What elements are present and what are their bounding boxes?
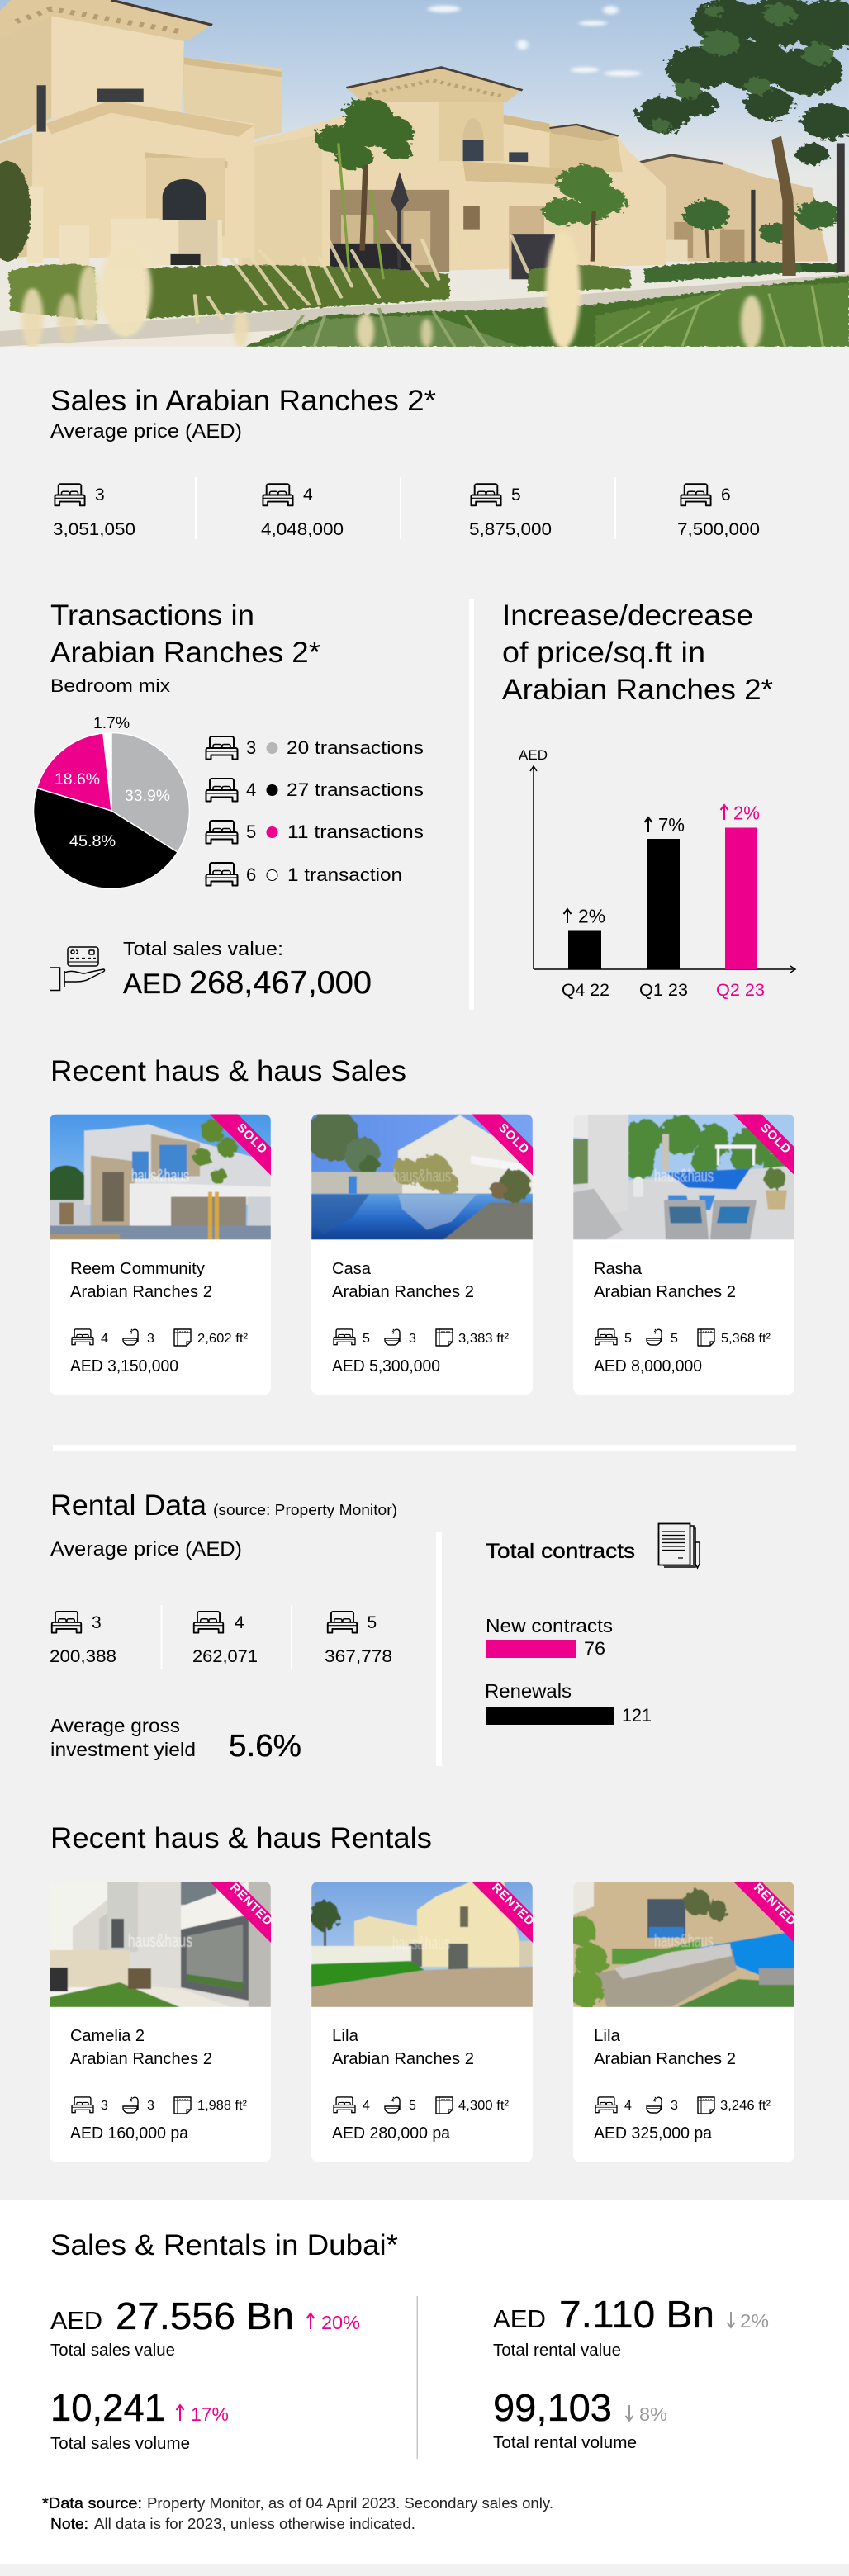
section heading: price per sq.ft change: of price/sq.ft in	[502, 637, 705, 669]
gross investment yield	[50, 1715, 301, 1764]
total sales value: Total sales value:	[123, 938, 283, 959]
heading: recent sales: Recent haus & haus Sales	[50, 1055, 406, 1087]
bar chart: price per sq.ft by quarter: Q1 23	[639, 981, 688, 1000]
card: Casa sale: Arabian Ranches 2	[332, 1283, 474, 1301]
pie legend: 1 transaction	[287, 864, 402, 885]
card: Reem Community sale: SOLD	[234, 1120, 270, 1157]
gross investment yield: 5.6%	[229, 1729, 301, 1764]
average sale price by bedroom: 4	[303, 485, 313, 504]
card: Rasha sale: AED 8,000,000	[594, 1357, 702, 1376]
bar chart: price per sq.ft by quarter: Q2 23	[716, 981, 765, 1000]
card: Lila rental 2: 3	[671, 2099, 678, 2113]
card: Lila rental 2: Arabian Ranches 2	[594, 2050, 736, 2068]
total contracts heading: Total contracts	[486, 1540, 635, 1563]
card: Reem Community sale: AED 3,150,000	[70, 1357, 178, 1376]
card: Lila rental 1: 4	[363, 2099, 370, 2113]
card: Rasha sale: 5,368 ft²	[721, 1332, 771, 1346]
footnote: Note:	[50, 2516, 88, 2532]
card: Rasha sale: Rasha	[594, 1260, 643, 1278]
pie chart: bedroom mix: 1.7%	[93, 715, 130, 732]
stat: total sales value	[50, 2294, 360, 2360]
bar: new contracts: New contracts	[486, 1615, 613, 1636]
average rental price by bedroom: 262,071	[192, 1647, 258, 1666]
card: Lila rental 2: RENTED	[751, 1881, 799, 1929]
bar: new contracts: 76	[584, 1638, 605, 1659]
section heading: price per sq.ft change: Arabian Ranches 2*	[502, 674, 773, 706]
heading: rental data: (source: Property Monitor)	[213, 1502, 397, 1518]
card: Lila rental 2: 4	[624, 2099, 632, 2113]
card: Reem Community sale	[45, 1115, 271, 1395]
bar chart: price per sq.ft by quarter: 7%	[658, 814, 685, 836]
card: Lila rental 1: AED 280,000 pa	[332, 2124, 451, 2143]
bar chart: price per sq.ft by quarter: AED	[519, 747, 548, 763]
card: Camelia 2 rental: Camelia 2	[70, 2027, 145, 2045]
heading: rental data	[50, 1489, 397, 1522]
card: Rasha sale: Arabian Ranches 2	[594, 1283, 736, 1301]
card: Camelia 2 rental: 1,988 ft²	[197, 2099, 248, 2113]
total sales value: AED	[123, 968, 182, 1000]
card: Lila rental 1: haus&haus	[392, 1933, 450, 1953]
card: Casa sale: AED 5,300,000	[332, 1357, 440, 1376]
stat: total rental value	[493, 2293, 769, 2360]
pie chart: bedroom mix: 18.6%	[55, 771, 100, 788]
average sale price by bedroom: 7,500,000	[677, 520, 760, 539]
card: Reem Community sale: 4	[101, 1332, 108, 1346]
stat: total rental value: AED	[493, 2304, 546, 2333]
card: Lila rental 1: 4,300 ft²	[458, 2099, 510, 2113]
card: Casa sale	[306, 1108, 533, 1395]
average rental price by bedroom: Average price (AED)	[50, 1538, 242, 1560]
card: Lila rental 2	[567, 1881, 799, 2162]
footnote: *Data source:	[42, 2495, 142, 2512]
card: Camelia 2 rental: RENTED	[227, 1881, 275, 1929]
card: Casa sale: Casa	[332, 1260, 372, 1278]
bar: renewals: 121	[622, 1705, 652, 1726]
gross investment yield: Average gross	[50, 1715, 180, 1736]
pie legend: 3	[246, 737, 256, 758]
card: Lila rental 1: Lila	[332, 2027, 359, 2045]
average rental price by bedroom: 4	[235, 1613, 244, 1632]
icon: hand holding card	[50, 947, 104, 991]
pie chart: bedroom mix: 33.9%	[125, 788, 170, 805]
card: Rasha sale: SOLD	[757, 1120, 794, 1157]
average sale price by bedroom: 3,051,050	[53, 520, 135, 539]
section heading: sales in Arabian Ranches 2	[50, 385, 436, 443]
pie chart: bedroom mix	[34, 715, 189, 888]
section heading: transactions: Bedroom mix	[50, 675, 170, 696]
card: Reem Community sale: 2,602 ft²	[197, 1332, 249, 1346]
bar chart: price per sq.ft by quarter	[519, 747, 795, 1000]
section heading: transactions: Arabian Ranches 2*	[50, 637, 320, 669]
card: Rasha sale: haus&haus	[654, 1166, 714, 1186]
section heading: transactions: Transactions in	[50, 599, 254, 632]
stat: total rental volume: 99,103	[493, 2386, 612, 2429]
card: Casa sale: 5	[363, 1332, 370, 1346]
pie legend: 4	[246, 779, 256, 800]
stat: total sales volume: 10,241	[50, 2386, 165, 2429]
card: Lila rental 1: RENTED	[489, 1881, 537, 1929]
bar: renewals: Renewals	[485, 1680, 572, 1702]
card: Camelia 2 rental: haus&haus	[128, 1930, 192, 1951]
average sale price by bedroom: 6	[721, 485, 731, 504]
total sales value: 268,467,000	[189, 965, 372, 1001]
pie legend: 6	[246, 864, 256, 885]
card: Reem Community sale: Arabian Ranches 2	[70, 1283, 212, 1301]
heading: rental data: Rental Data	[50, 1489, 207, 1522]
footnote: All data is for 2023, unless otherwise indicated.	[94, 2516, 415, 2532]
average sale price by bedroom: 5,875,000	[469, 520, 552, 539]
stat: total sales value: 27.556 Bn	[116, 2294, 294, 2337]
average rental price by bedroom: 5	[367, 1613, 377, 1632]
card: Lila rental 2: 3,246 ft²	[720, 2099, 771, 2113]
card: Reem Community sale: haus&haus	[131, 1166, 189, 1186]
card: Camelia 2 rental: AED 160,000 pa	[70, 2124, 189, 2143]
heading: recent rentals: Recent haus & haus Rentals	[50, 1822, 432, 1854]
card: Camelia 2 rental	[50, 1881, 275, 2162]
bar chart: price per sq.ft by quarter: 2%	[733, 803, 760, 824]
card: Casa sale: 3,383 ft²	[458, 1332, 510, 1346]
average rental price by bedroom: 3	[92, 1613, 102, 1632]
card: Rasha sale	[573, 1115, 799, 1395]
card: Lila rental 1: Arabian Ranches 2	[332, 2050, 474, 2068]
stat: total sales volume: Total sales volume	[50, 2435, 190, 2453]
stat: total sales value: AED	[50, 2306, 102, 2335]
section heading: price per sq.ft change	[502, 599, 773, 706]
stat: total sales value: 20%	[321, 2312, 360, 2333]
card: Camelia 2 rental: 3	[101, 2099, 108, 2113]
stat: total rental volume: 8%	[639, 2403, 667, 2425]
bar: renewals	[485, 1680, 652, 1726]
pie legend: 11 transactions	[287, 822, 424, 842]
card: Lila rental 2: haus&haus	[654, 1930, 714, 1951]
average rental price by bedroom: 200,388	[50, 1647, 116, 1666]
stat: total rental value: 7.110 Bn	[559, 2293, 714, 2336]
footnote: Property Monitor, as of 04 April 2023. Secondary sales only.	[147, 2495, 553, 2512]
average rental price by bedroom	[50, 1538, 392, 1669]
panel: sales and rentals in Dubai	[0, 2200, 849, 2564]
card: Lila rental 2: AED 325,000 pa	[594, 2124, 713, 2143]
card: Reem Community sale: 3	[147, 1332, 154, 1346]
footnote	[42, 2495, 553, 2532]
section heading: sales in Arabian Ranches 2: Sales in Arabian Ranches 2*	[50, 385, 436, 417]
section heading: sales in Arabian Ranches 2: Average price (AED)	[50, 420, 242, 443]
average sale price by bedroom	[53, 477, 760, 539]
pie chart: bedroom mix: 45.8%	[69, 833, 116, 850]
bar: new contracts	[486, 1615, 613, 1659]
card: Rasha sale: 5	[671, 1332, 678, 1346]
card: Lila rental 1	[310, 1881, 537, 2162]
card: Casa sale: haus&haus	[393, 1166, 451, 1186]
average sale price by bedroom: 5	[511, 485, 521, 504]
average sale price by bedroom: 4,048,000	[261, 520, 344, 539]
pie legend: 27 transactions	[287, 779, 424, 800]
card: Lila rental 1: 5	[409, 2099, 416, 2113]
card: Lila rental 2: Lila	[594, 2027, 621, 2045]
stat: total rental volume	[493, 2386, 667, 2452]
card: Casa sale: 3	[409, 1332, 416, 1346]
pie legend: 5	[246, 822, 256, 842]
card: Camelia 2 rental: Arabian Ranches 2	[70, 2050, 212, 2068]
bar chart: price per sq.ft by quarter: 2%	[578, 905, 605, 926]
stat: total sales volume	[50, 2386, 229, 2453]
stat: total sales volume: 17%	[191, 2403, 229, 2425]
stat: total rental value: Total rental value	[493, 2342, 621, 2360]
card: Casa sale: SOLD	[496, 1120, 532, 1157]
gross investment yield: investment yield	[50, 1739, 196, 1760]
heading: Dubai: Sales & Rentals in Dubai*	[50, 2229, 398, 2261]
pie legend	[206, 736, 424, 885]
hero photo: villas in Arabian Ranches 2	[0, 0, 849, 349]
stat: total sales value: Total sales value	[50, 2342, 175, 2360]
total sales value	[123, 938, 372, 1001]
stat: total rental value: 2%	[740, 2310, 769, 2332]
section heading: transactions	[50, 599, 320, 696]
pie legend: 20 transactions	[287, 737, 424, 758]
stat: total rental volume: Total rental volume	[493, 2434, 637, 2452]
card: Reem Community sale: Reem Community	[70, 1260, 205, 1278]
icon: contract document	[659, 1524, 700, 1568]
average sale price by bedroom: 3	[95, 485, 105, 504]
card: Camelia 2 rental: 3	[147, 2099, 154, 2113]
average rental price by bedroom: 367,778	[325, 1647, 392, 1666]
bar chart: price per sq.ft by quarter: Q4 22	[562, 981, 609, 1000]
section heading: price per sq.ft change: Increase/decrease	[502, 599, 753, 632]
card: Rasha sale: 5	[624, 1332, 632, 1346]
